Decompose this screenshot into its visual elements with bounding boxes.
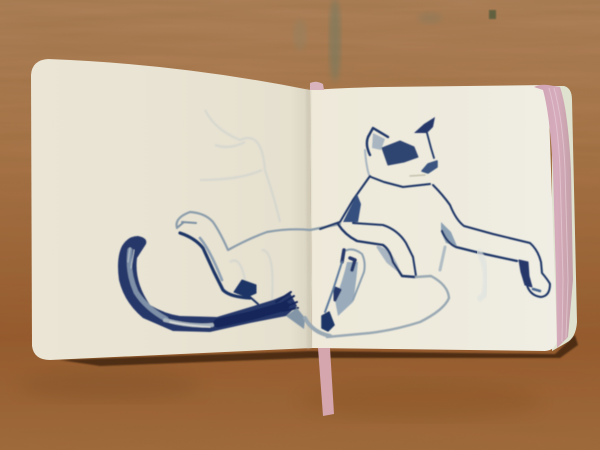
cat drawing xyxy=(118,117,550,337)
page fold shadow xyxy=(306,89,312,349)
faint erased pencil sketch on left page xyxy=(200,110,280,300)
book shadow xyxy=(60,335,578,366)
hip outline xyxy=(327,276,449,337)
raised knee leg xyxy=(305,249,365,336)
front right leg xyxy=(433,185,550,297)
left page xyxy=(31,59,312,360)
top ribbon tab xyxy=(310,82,324,90)
ribbon bookmark xyxy=(318,348,334,416)
elastic band xyxy=(534,85,573,348)
ears xyxy=(367,117,435,155)
collar line xyxy=(371,177,430,187)
head xyxy=(365,133,437,176)
body back and shading xyxy=(320,176,370,229)
page stack edge xyxy=(552,86,577,351)
belly line xyxy=(440,247,445,270)
tail xyxy=(118,236,305,332)
front left leg xyxy=(338,223,416,277)
right page xyxy=(310,85,557,351)
hind leg and paw xyxy=(177,212,340,304)
faint erased sketch on right page xyxy=(478,250,486,300)
